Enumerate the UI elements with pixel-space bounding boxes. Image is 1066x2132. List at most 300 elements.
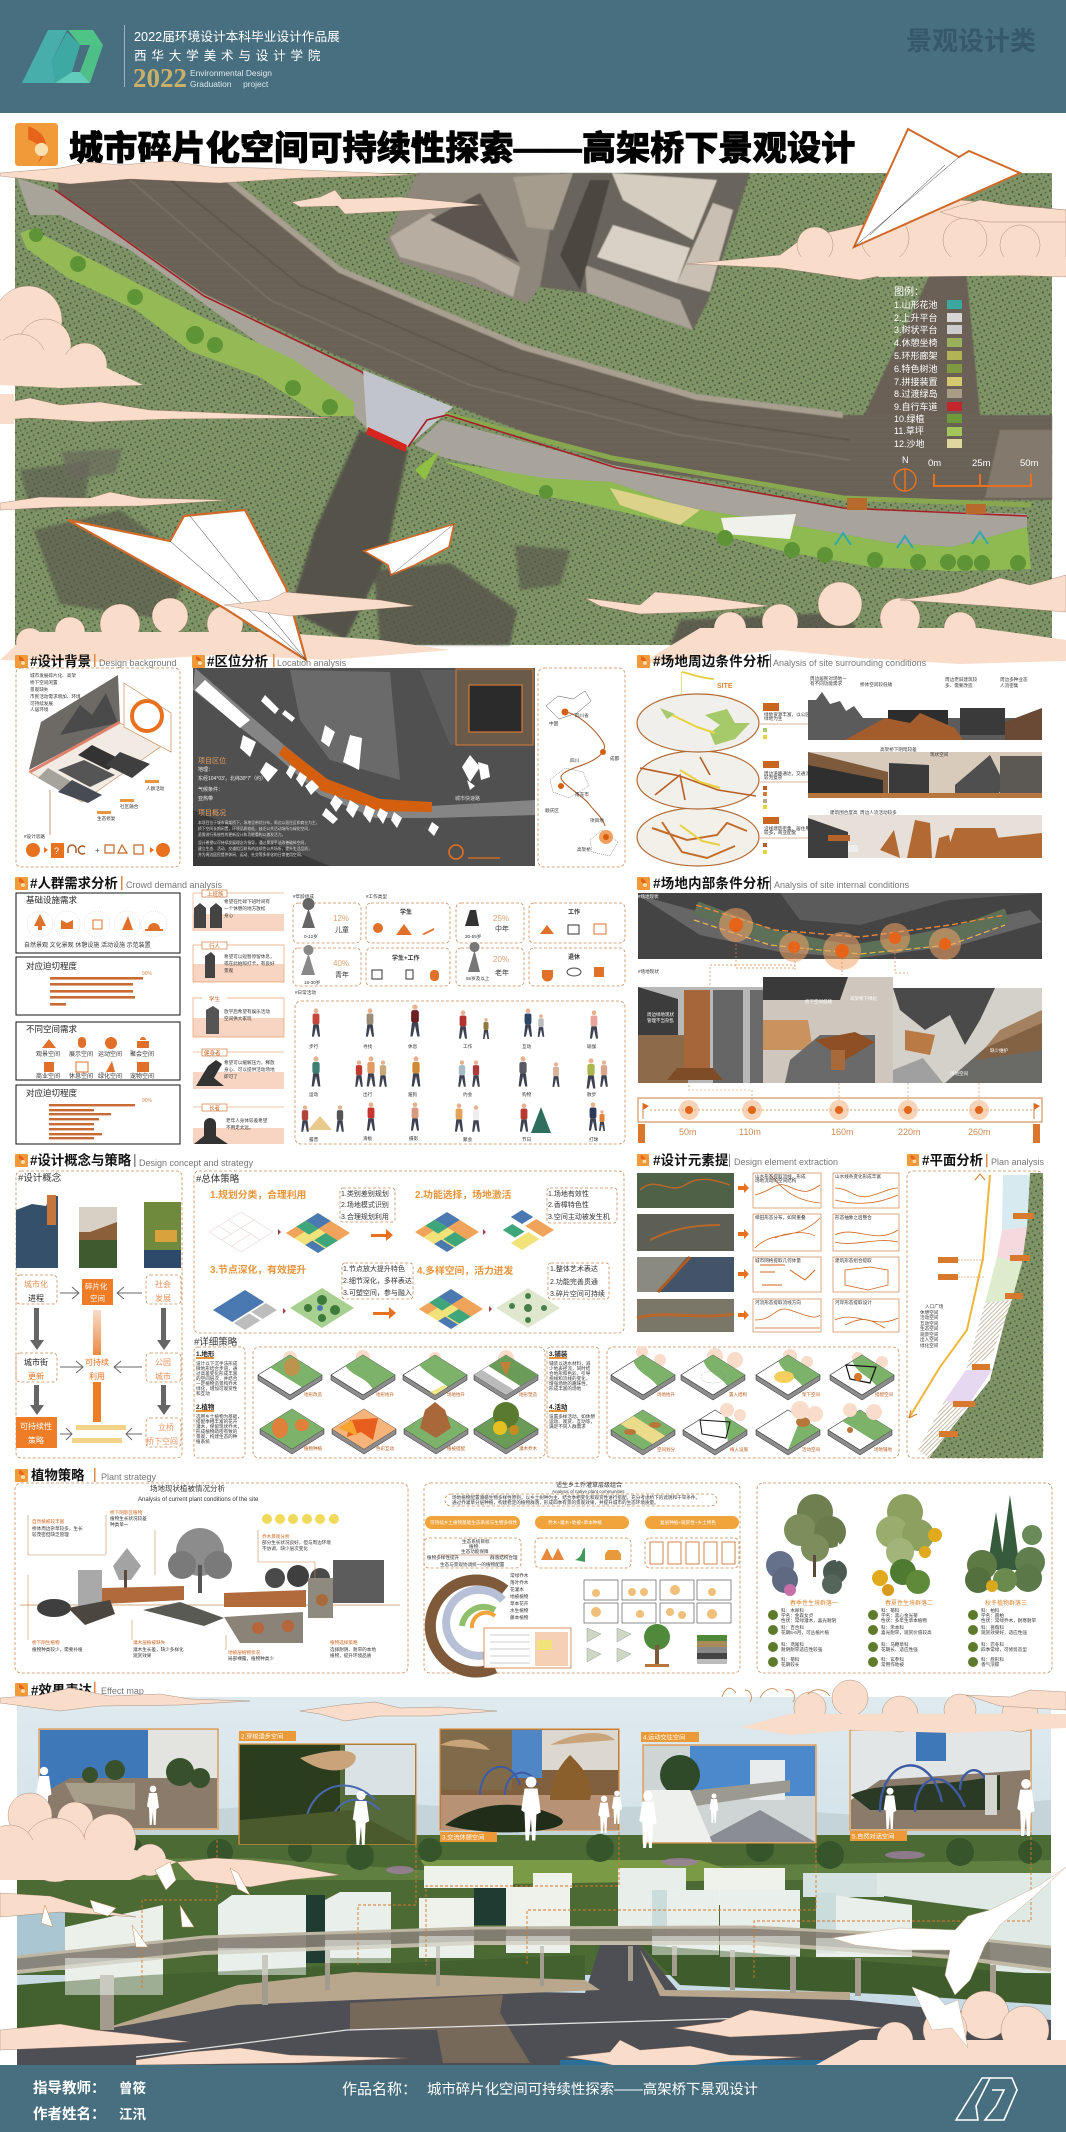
site photos: 场地空间 xyxy=(950,1070,968,1077)
plant combination captions xyxy=(790,1599,1027,1607)
location route panel: 顺庆区 xyxy=(545,807,559,814)
box: urgency bars one xyxy=(16,957,180,1015)
aerial strip with nodes xyxy=(638,893,1042,970)
plant annotations: 种类单一 xyxy=(110,1521,129,1528)
plant species bullets: 科：唇形科 xyxy=(981,1656,1004,1663)
element rows: 建筑形态组合提取 xyxy=(835,1257,872,1264)
plant species bullets xyxy=(768,1607,1037,1668)
strategy iso diagrams xyxy=(209,1210,560,1330)
background text list: 桥下空间闲置 xyxy=(30,679,58,686)
heading: #区位分析 xyxy=(207,653,268,669)
plant combination captions: 春季性生境群落一 xyxy=(790,1599,838,1607)
plant species bullets: 四季常绿，可修剪造型 xyxy=(981,1646,1027,1653)
strategy titles: 1.规划分类，合理利用 xyxy=(210,1188,306,1201)
section: design element extraction xyxy=(637,1152,899,1332)
age and work cards: 学生 xyxy=(400,908,412,916)
strategy boxes xyxy=(424,1538,739,1568)
road surface xyxy=(17,1945,1051,2065)
age and work cards: 中年 xyxy=(495,924,509,933)
map keys: 较多，商业配套 xyxy=(764,829,797,836)
detail iso tiles second group: 场地铺地 xyxy=(874,1446,892,1453)
card: fitness: 身心、可以提供活动场地 xyxy=(224,1066,275,1073)
view 4 xyxy=(639,1745,816,1848)
site photos: 高架桥下绿化 xyxy=(850,995,877,1002)
north arrow and scale bar: 25m xyxy=(972,458,991,469)
detail strategy text column two: 设置多样活动，如休憩 xyxy=(549,1413,595,1420)
age and work cards: 老年 xyxy=(495,968,509,977)
plant annotations: 植物生长状况较差 xyxy=(110,1515,147,1522)
panorama callouts: 多、需要改造 xyxy=(945,682,973,689)
aerial photo: 东经104°03'，北纬30°7'（约） xyxy=(198,775,266,782)
tiles row 1: 地形改造 xyxy=(304,1391,322,1398)
map legend xyxy=(894,285,962,449)
card: office worker: 一个休憩的地方放松 xyxy=(224,905,266,912)
paper plane large xyxy=(68,510,306,660)
figures row 1: 互动 xyxy=(522,1043,532,1050)
plant ring chart: 地被植物 xyxy=(510,1593,529,1600)
element rows xyxy=(637,1173,899,1332)
figures row 2 xyxy=(309,1056,608,1098)
detail strategy text column one xyxy=(194,1347,245,1458)
plan panel xyxy=(907,1171,1043,1458)
plant combination one xyxy=(766,1494,848,1596)
card: fitness: 即可了 xyxy=(224,1073,238,1080)
strategy notes: 3.空间主动被发生机 xyxy=(548,1212,610,1221)
heading: #场地内部条件分析 xyxy=(653,875,770,891)
card: office worker: 希望在忙碌下班时间有 xyxy=(224,898,270,905)
plant species bullets: 香气浓郁 xyxy=(981,1661,1000,1668)
plant annotations: 桥下阴生植物 xyxy=(32,1639,60,1646)
concept flow boxes: 公园 xyxy=(155,1358,171,1367)
overall strategy panel xyxy=(194,1171,624,1348)
strategy boxes: 生态功能保障 xyxy=(461,1548,489,1555)
heading xyxy=(15,875,223,891)
aerial photo: 地理： xyxy=(198,766,213,773)
box: space demand xyxy=(16,1022,180,1080)
background text list: 城市发展碎片化、高架 xyxy=(30,672,76,679)
card: student: 空间供大家玩 xyxy=(224,1015,252,1022)
header divider and college text: 2022届环境设计本科毕业设计作品展 xyxy=(134,30,340,44)
card: visitor: 景观 xyxy=(224,968,234,974)
detail iso tiles second group: 搭配空间 xyxy=(875,1391,893,1398)
landscape strip east xyxy=(408,414,1031,571)
concept flow boxes xyxy=(16,1275,181,1448)
concept flow boxes: 可持续 xyxy=(85,1357,109,1367)
plant ring chart: 藤本植物 xyxy=(510,1614,529,1621)
plant species bullets: 学名：金森女贞 xyxy=(781,1612,814,1619)
strategy notes: 2.场地模式识别 xyxy=(341,1200,389,1209)
view labels: 1.街边零散空间 xyxy=(41,1832,83,1840)
aerial photo: 亟需进行系统性的更新设计和功能重构以激发活力。 xyxy=(198,832,285,837)
north arrow and scale bar: 50m xyxy=(1020,458,1039,469)
card: office worker: 身心 xyxy=(224,912,234,919)
box: space demand: 不同空间需求 xyxy=(26,1024,78,1034)
location route panel: 项目地 xyxy=(590,817,604,824)
aerial photo: 并为周边居民提供休闲、运动、社交等多样化的日常使用空间。 xyxy=(198,852,304,857)
element rows: 城市网格提取几何体量 xyxy=(755,1257,801,1264)
site photos: 管理不当杂乱 xyxy=(647,1017,674,1024)
location route panel: 高架桥 xyxy=(577,846,591,853)
section: location analysis xyxy=(192,653,625,867)
aerial photo: 桥下空间长期闲置，环境品质较低，缺乏公共活动场所与绿化空间， xyxy=(198,826,312,831)
heading xyxy=(637,875,910,891)
plant species bullets: 耐阴耐旱适应性较强 xyxy=(781,1646,823,1653)
age and work cards: 工作 xyxy=(568,908,580,916)
map keys: 周边道路通达，交通流线 xyxy=(764,770,815,777)
strategy boxes: 生态系统目标 xyxy=(462,1538,490,1545)
layered site maps xyxy=(637,694,759,866)
plant panel one: 场地现状植被情况分析 xyxy=(150,1483,225,1493)
master plan map xyxy=(15,173,1052,645)
plant species bullets: 科：马鞭草科 xyxy=(881,1641,909,1648)
scene clouds xyxy=(0,1680,1066,2072)
plant annotations: 桥体周边杂草较多，生长 xyxy=(32,1525,83,1532)
heading: #设计元素提 xyxy=(653,1152,729,1168)
figures row 2: 购物 xyxy=(522,1091,532,1098)
strategy titles xyxy=(210,1188,514,1277)
age and work cards: 学生+工作 xyxy=(392,954,420,962)
plant combination captions: 春夏性生境群落二 xyxy=(885,1599,933,1607)
age and work cards: 40% xyxy=(333,959,349,968)
map legend: 9.自行车道 xyxy=(894,401,938,412)
location route panel xyxy=(538,668,625,867)
heading: Plan analysis xyxy=(991,1157,1045,1167)
landscape strip west xyxy=(17,178,378,430)
age and work cards: 儿童 xyxy=(335,925,349,934)
card: elder: 老年人身体较差希望 xyxy=(226,1117,268,1124)
panorama row 3 xyxy=(808,815,1042,858)
card: visitor: 或在此拍照打卡，有良好 xyxy=(224,960,275,967)
plant combination two xyxy=(872,1494,942,1596)
concept flow boxes: 策略 xyxy=(28,1435,44,1445)
heading: Crowd demand analysis xyxy=(126,880,223,890)
card: elder: 长者 xyxy=(209,1104,221,1112)
tiles row 1: 地形塑造 xyxy=(519,1391,537,1398)
box: facility demand xyxy=(16,893,180,953)
plan panel: 休憩空间 xyxy=(920,1309,939,1316)
card: elder xyxy=(193,1104,284,1144)
map keys xyxy=(760,703,815,854)
plant annotations: 地被层植物状况 xyxy=(228,1649,261,1656)
plant species bullets: 花期长、适应性强 xyxy=(881,1646,918,1653)
heading: Design concept and strategy xyxy=(139,1158,254,1168)
section: crowd demand xyxy=(15,875,625,1144)
project name: 城市碎片化空间可持续性探索——高架桥下景观设计 xyxy=(427,2081,758,2098)
aerial photo: 城市快速路 xyxy=(455,795,480,802)
tiles row 2: 色彩互动 xyxy=(376,1445,394,1452)
section: concept and strategy xyxy=(15,1152,899,1458)
connector lines xyxy=(142,1832,1031,1990)
strategy titles: 2.功能选择，场地激活 xyxy=(415,1188,512,1201)
figures row 3: 打球 xyxy=(589,1136,599,1142)
plant species bullets: 性状：常绿灌木，喜光耐阴 xyxy=(781,1617,837,1624)
plant species bullets: 学名：黑心金光菊 xyxy=(881,1612,918,1619)
heading: Design background xyxy=(99,658,177,668)
paper plane small xyxy=(364,524,454,575)
plant species bullets: 科：禾本科 xyxy=(881,1624,904,1631)
header band xyxy=(0,0,1066,113)
view labels xyxy=(39,1731,907,1842)
detail strategy text column two: 合地形和色彩，引导 xyxy=(549,1370,591,1377)
small birds sketches xyxy=(722,1688,830,1702)
background text list: 人居环境 xyxy=(30,706,49,713)
detail strategy text column one: 搭配季相丰富的花卉 xyxy=(196,1418,238,1425)
element rows: 场地流动的空间结构 xyxy=(755,1177,797,1184)
detail strategy text column one: 形成植物疏密有致的 xyxy=(196,1428,238,1435)
people activity panel: #日常活动 xyxy=(295,989,316,996)
dark tree shadow patches xyxy=(20,430,860,645)
aerial photo: 设计希望以可持续发展理念为指导，通过景观手法改善破碎空间， xyxy=(198,840,308,845)
figures row 1: 休息 xyxy=(408,1043,418,1050)
detail iso tiles second group: 植入设施 xyxy=(730,1446,748,1453)
large white bird xyxy=(832,1867,1066,1995)
footer band xyxy=(0,2065,1066,2132)
concept panel: #设计概念 xyxy=(18,1172,62,1184)
view labels: 3.交流休憩空间 xyxy=(442,1834,484,1842)
plant species bullets: 性状：常绿乔木，耐寒耐旱 xyxy=(981,1617,1037,1624)
age and work cards: 30-55岁 xyxy=(465,933,482,940)
figures row 1: 寻找 xyxy=(363,1043,373,1050)
heading: #人群需求分析 xyxy=(30,875,118,891)
concept flow boxes: 利用 xyxy=(89,1371,105,1381)
plant species bullets: 科：木犀科 xyxy=(781,1607,804,1614)
detail strategy text column two xyxy=(547,1347,599,1458)
plant panel two: 通过乔灌草分层种植，构建稳定的植物群落，形成四季有景的景观效果，并提升城市的生态环境质量。 xyxy=(452,1499,659,1506)
small white birds left xyxy=(41,1862,250,1947)
heading xyxy=(15,1152,254,1168)
heading: Design element extraction xyxy=(734,1157,838,1167)
panorama callouts: 人流密集 xyxy=(1000,682,1019,689)
card: student: 学生 xyxy=(209,995,221,1003)
strategy titles: 4.多样空间，活力迸发 xyxy=(417,1264,514,1277)
element rows: 河流形态提取流线方向 xyxy=(755,1299,801,1306)
heading: #设计背景 xyxy=(30,653,91,669)
concept flow boxes: 城市化 xyxy=(24,1279,48,1289)
tiles row 2: 灌木乔木 xyxy=(519,1445,537,1452)
tiles row 2 xyxy=(260,1402,538,1454)
box: urgency bars two: 对应迫切程度 xyxy=(26,1088,78,1098)
map keys: 绿地为主 xyxy=(764,715,783,722)
concept flow boxes: 碎片化 xyxy=(85,1281,108,1291)
site pole xyxy=(681,672,733,842)
box: space demand: 宠物空间 xyxy=(130,1072,154,1080)
box: urgency bars one: 对应迫切程度 xyxy=(26,961,78,971)
map keys: 较为复杂 xyxy=(764,774,783,781)
plan panel: 出入空间 xyxy=(920,1336,939,1343)
detail strategy text column two: 视线和流线的变化， xyxy=(549,1375,590,1382)
plant annotations: 不协调，缺少层次变化 xyxy=(262,1545,308,1552)
background text list: 可持续发展 xyxy=(30,700,53,707)
plant colour swatches xyxy=(262,1514,339,1524)
concept panel xyxy=(16,1171,182,1458)
location route panel: 四川省 xyxy=(575,712,589,719)
plant panel one: Analysis of current plant conditions of the site xyxy=(138,1497,259,1503)
age and work cards: 25% xyxy=(493,914,509,923)
concept flow boxes: 发展 xyxy=(155,1293,171,1303)
plant panel two: 适生乡土乔灌草层级组合 xyxy=(556,1481,622,1489)
plant species bullets: 科：菊科 xyxy=(881,1607,900,1614)
site pole: SITE xyxy=(717,683,733,690)
heading: #效果表达 xyxy=(31,1682,93,1698)
timeline: 50m xyxy=(679,1127,697,1137)
advisor and author: 江汛 xyxy=(119,2107,146,2122)
panorama callouts: 建筑围合度高 xyxy=(830,809,858,816)
strategy boxes: 生态与景观协调统一的植物配置 xyxy=(440,1561,505,1568)
strategy boxes: 植物多样性提升 xyxy=(427,1554,460,1561)
plant panel two: 场地植物配置遵循生物多样性原则，以乡土树种为主、结合季相变化和观赏性进行搭配，充分考虑桥下的遮阴和干旱条件。 xyxy=(452,1494,700,1501)
plant species bullets: 观赏效果好，适应性强 xyxy=(981,1629,1027,1636)
strategy pills: 乔木+灌木+地被+草本种植 xyxy=(548,1519,602,1526)
plan panel: 观景空间 xyxy=(920,1331,939,1338)
map legend: 6.特色树池 xyxy=(894,363,938,374)
plan panel: 绿化空间 xyxy=(920,1342,939,1349)
plant panel two: Analysis of native plant communities xyxy=(552,1489,625,1494)
plan panel: 生态空间 xyxy=(920,1325,939,1332)
project name: 作品名称： xyxy=(342,2081,417,2098)
plant annotations: 植物种类较少，需要补植 xyxy=(32,1646,83,1653)
strategy notes: 3.碎片空间可持续 xyxy=(550,1289,605,1298)
isometric collage xyxy=(29,675,171,835)
strategy pills: 可持续乡土植物基础生态系统与生物多样性 xyxy=(430,1519,518,1526)
age and work cards xyxy=(293,893,625,986)
timeline xyxy=(638,1083,1042,1143)
element rows: 梯田形态分布，如同重叠 xyxy=(755,1214,806,1221)
header divider and college text: Graduation project xyxy=(190,79,269,89)
strategy notes: 3.可塑空间，参与融入 xyxy=(343,1288,412,1297)
map legend: 8.过渡绿岛 xyxy=(894,388,938,399)
section: rendering scene xyxy=(0,1680,1066,2072)
tiles row 1: 地形抬升 xyxy=(376,1391,394,1398)
aerial photo: 项目概况 xyxy=(198,808,226,817)
section: design background xyxy=(15,653,180,867)
render views xyxy=(36,1729,1035,1848)
plant species bullets: 科：忍冬科 xyxy=(981,1641,1004,1648)
advisor and author: 指导教师： xyxy=(33,2079,106,2097)
detail strategy text column one: 绿化，增加可观赏性 xyxy=(196,1385,238,1392)
view labels: 4.运动交往空间 xyxy=(643,1734,685,1742)
detail strategy text column one: 微地形结合步道，通 xyxy=(196,1365,238,1372)
photo row caption: #场地现状 xyxy=(638,968,659,975)
strategy boxes: 群落结构合理 xyxy=(490,1554,518,1561)
panorama callouts: 周边多种业态 xyxy=(1000,676,1028,683)
plant annotations: 灌木生长差，缺少多样化 xyxy=(133,1646,184,1653)
box: space demand: 绿化空间 xyxy=(98,1072,122,1080)
detail strategy text column one: 2.植物 xyxy=(196,1402,215,1411)
timeline: 160m xyxy=(831,1127,854,1137)
plant annotations: 部分生长状况良好，但与周边环境 xyxy=(262,1539,331,1546)
icon: footer logo xyxy=(956,2078,1017,2120)
box: space demand: 商业空间 xyxy=(36,1072,60,1080)
age and work cards: 青年 xyxy=(335,970,349,979)
heading xyxy=(15,653,177,669)
location route panel: 成都 xyxy=(610,755,620,762)
heading: Analysis of site internal conditions xyxy=(774,880,910,890)
plant annotations: 植物，提升环境品质 xyxy=(330,1652,372,1659)
detail strategy text column one: 过高差变化形成丰富 xyxy=(196,1370,238,1377)
plant species bullets: 科：蔷薇科 xyxy=(981,1624,1004,1631)
heading: #设计概念与策略 xyxy=(30,1152,132,1168)
figures row 3: 摄影 xyxy=(409,1135,419,1142)
figures row 1: 步行 xyxy=(309,1043,319,1050)
plant species bullets: 科：柏科 xyxy=(981,1607,1000,1614)
section: plant strategy xyxy=(15,1467,1052,1673)
age and work cards: 18-30岁 xyxy=(304,979,321,986)
plant ring chart: 水生植物 xyxy=(510,1607,529,1614)
aerial photo xyxy=(193,668,535,866)
plant panel two xyxy=(424,1481,740,1673)
detail strategy text column one: 植系统 xyxy=(196,1438,210,1445)
detail strategy text column one: 灌木，保留现状乔木， xyxy=(196,1423,242,1430)
detail strategy text column two: 运动、观赏、互动等， xyxy=(549,1418,595,1425)
detail iso tiles second group: 空间划分 xyxy=(657,1446,675,1453)
figures row 3: 滑板 xyxy=(363,1135,373,1142)
plant panel three xyxy=(757,1483,1052,1673)
map legend: 4.休憩坐椅 xyxy=(894,337,938,348)
detail iso tiles second group: 场地抬升 xyxy=(657,1391,675,1398)
concept flow boxes: 空间 xyxy=(90,1293,105,1303)
concept flow boxes: 更新 xyxy=(28,1371,44,1381)
background text list: 市民活动需求增加、环境 xyxy=(30,693,81,700)
overall strategy panel: #总体策略 xyxy=(196,1173,240,1185)
people activity panel xyxy=(295,989,625,1144)
heading xyxy=(192,653,347,669)
location route panel: 四川 xyxy=(570,758,580,763)
element rows: 河岸形态提取设计 xyxy=(835,1299,872,1306)
detail iso tiles second group xyxy=(607,1346,899,1458)
heading xyxy=(637,1152,838,1168)
figures row 3: 聚会 xyxy=(463,1136,473,1143)
site photos xyxy=(638,932,1042,1083)
age and work cards: 退休 xyxy=(568,953,580,961)
detail strategy text column two: 3.铺装 xyxy=(549,1349,568,1358)
card: office worker: 上班族 xyxy=(207,890,224,898)
detail strategy text column one: 1.地形 xyxy=(196,1349,215,1358)
plant species bullets: 性状：多年生草本植物 xyxy=(881,1617,927,1624)
cloud over large plane xyxy=(224,592,415,616)
strategy notes: 1.整体艺术表达 xyxy=(550,1264,598,1273)
box: urgency bars two: 90% xyxy=(142,1098,153,1104)
concept flow boxes: 桥下空间 xyxy=(146,1436,178,1446)
box: space demand: 聚会空间 xyxy=(130,1050,154,1058)
card: visitor xyxy=(193,942,284,982)
small white bird right xyxy=(912,1987,968,2048)
map legend: 12.沙地 xyxy=(894,438,925,449)
box: space demand: 展示空间 xyxy=(69,1050,93,1058)
panorama row 1 xyxy=(808,692,1042,740)
blocks behind the viaduct xyxy=(17,1866,1051,1995)
bottom flow icons: + xyxy=(95,846,100,855)
heading xyxy=(15,1467,157,1483)
site photos: 缺少维护 xyxy=(990,1047,1008,1054)
panorama callouts: 周边人流活动较多 xyxy=(860,809,897,816)
plant combination three xyxy=(965,1495,1045,1593)
timeline: 110m xyxy=(739,1127,761,1137)
figures row 2: 出行 xyxy=(363,1091,373,1098)
heading: 植物策略 xyxy=(31,1467,85,1483)
card: fitness xyxy=(193,1049,284,1089)
plan panel: 互动空间 xyxy=(920,1320,939,1327)
card: office worker xyxy=(193,890,284,931)
advisor and author: 曾筱 xyxy=(119,2080,146,2096)
map keys: 绿地资源丰富，以公园 xyxy=(764,711,810,718)
box: facility demand: 自然景观 文化景观 休憩设施 活动设施 示范装置 xyxy=(24,941,151,949)
element rows: 山水形态提取流线，形成 xyxy=(755,1173,806,1180)
section: internal conditions xyxy=(637,875,1042,1143)
plant annotations: 观赏效果 xyxy=(133,1652,152,1659)
card: student: 放学后希望有娱乐活动 xyxy=(224,1008,270,1015)
concept arrows xyxy=(30,1287,171,1440)
header divider and college text: 西华大学美术与设计学院 xyxy=(134,48,325,63)
